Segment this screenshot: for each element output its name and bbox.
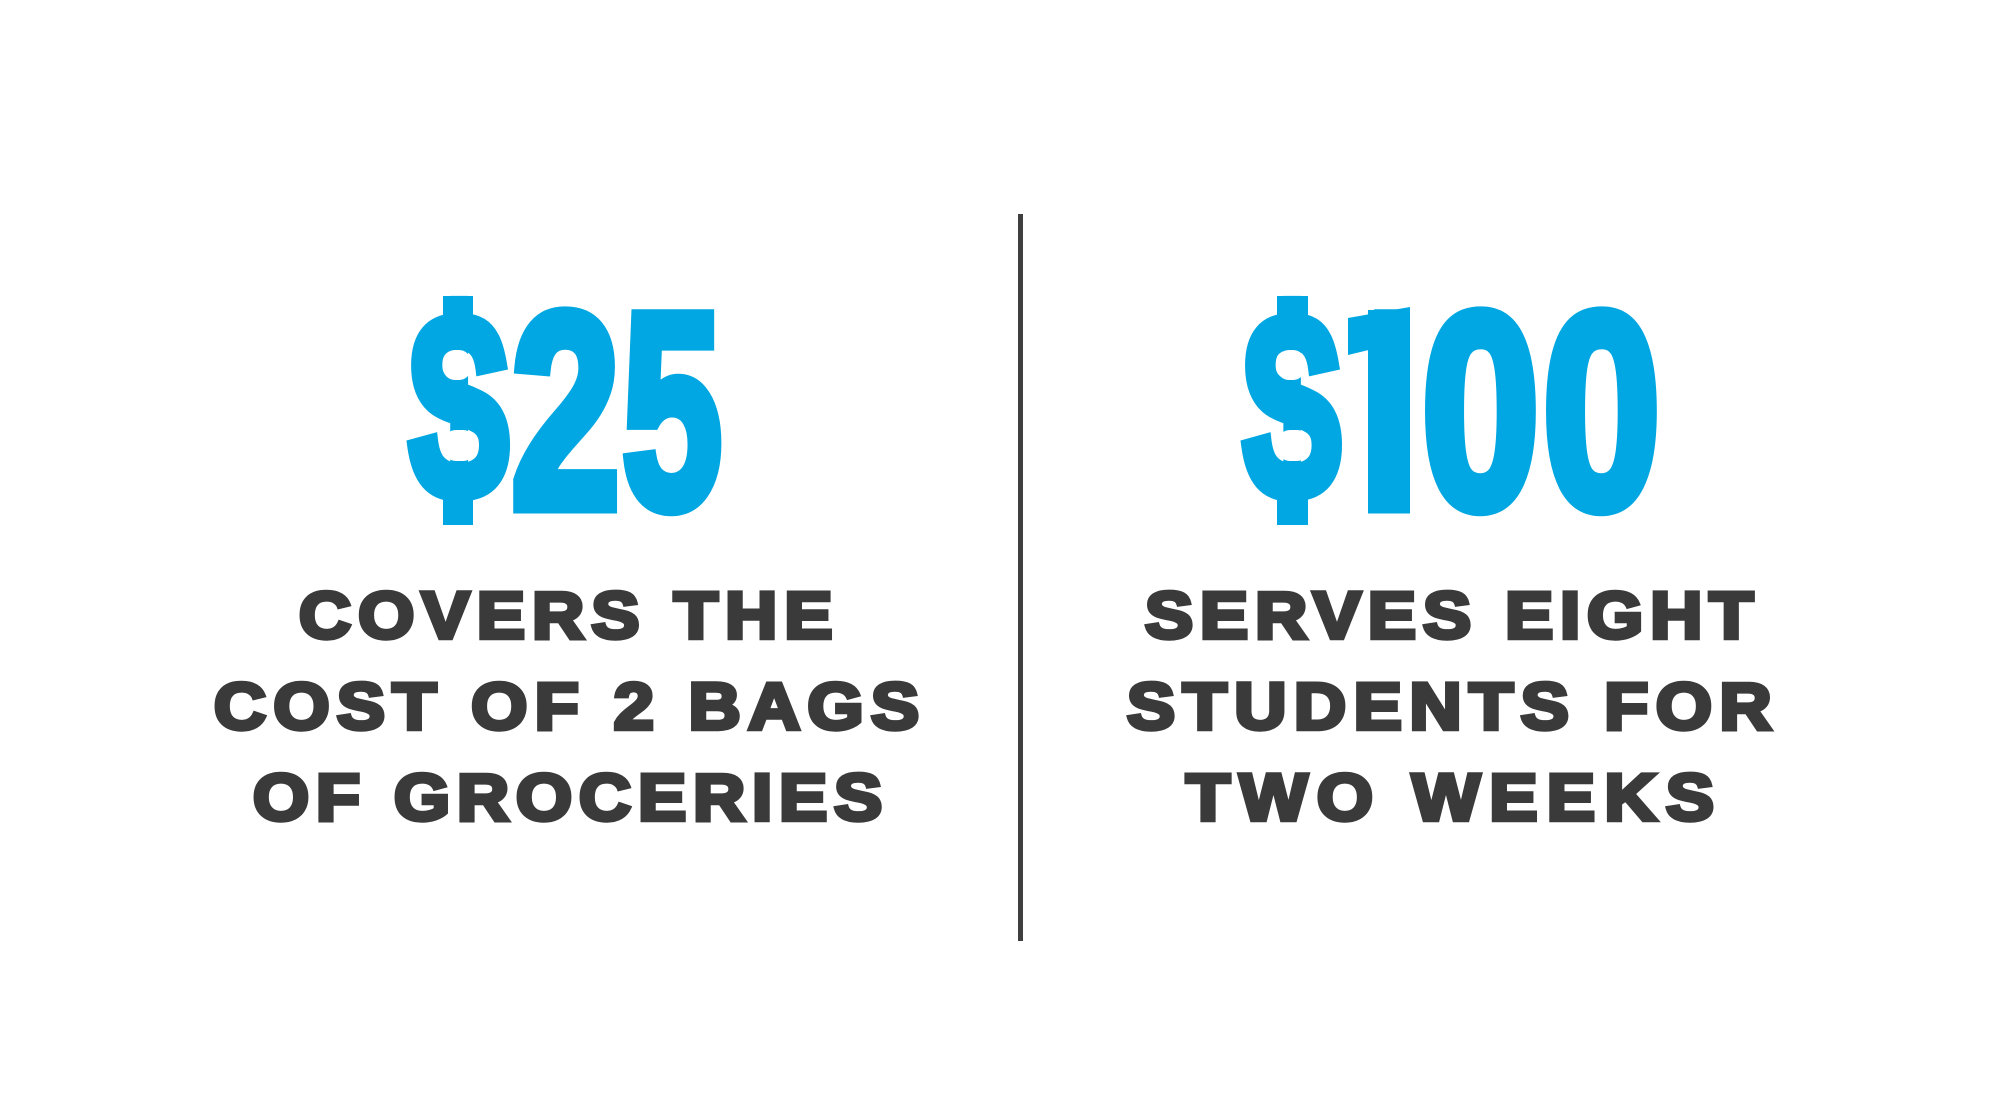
panel: $25 — [214, 255, 919, 834]
amount: $25: 2 — [511, 256, 620, 567]
caption: covers the cost of 2 bags of groceries: COVERS THE — [299, 579, 833, 652]
caption: covers the cost of 2 bags of groceries: COST OF 2 BAGS — [214, 670, 919, 743]
caption: serves eight students for two weeks — [1127, 579, 1772, 834]
caption: serves eight students for two weeks: SERVES EIGHT — [1145, 579, 1753, 652]
amount: $25: $ — [409, 259, 508, 554]
amount: $25 — [409, 255, 722, 567]
divider — [1018, 214, 1023, 941]
amount: $100: $ — [1243, 260, 1340, 555]
caption: serves eight students for two weeks: STUDENTS FOR — [1127, 670, 1772, 743]
amount: $100: 1 — [1320, 257, 1450, 567]
amount: $100: 0 — [1543, 256, 1661, 567]
caption: covers the cost of 2 bags of groceries — [214, 579, 919, 834]
amount: $25: 5 — [622, 255, 722, 566]
caption: covers the cost of 2 bags of groceries: OF GROCERIES — [253, 761, 882, 834]
amount: $100 — [1243, 256, 1661, 567]
amount: $100: 0 — [1422, 256, 1540, 567]
panel: $100 — [1127, 256, 1772, 834]
caption: serves eight students for two weeks: TWO WEEKS — [1186, 761, 1714, 834]
